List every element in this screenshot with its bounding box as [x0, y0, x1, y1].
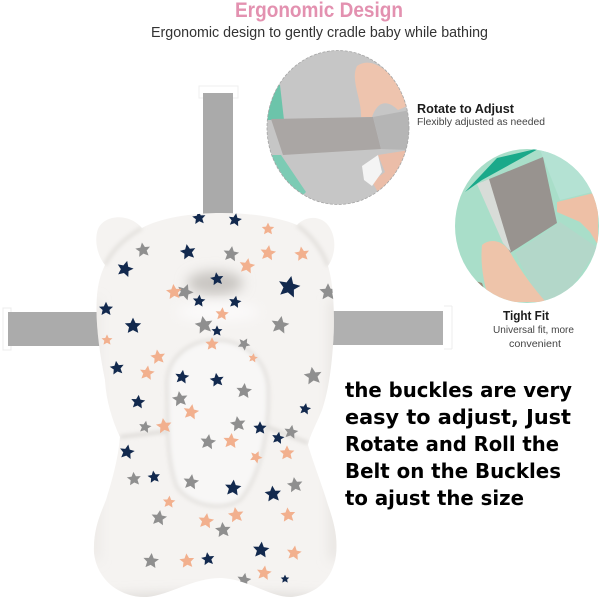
- buckle explanation text: Rotate and Roll the: [345, 432, 559, 456]
- buckle explanation text: easy to adjust, Just: [345, 405, 571, 429]
- bath cushion: [85, 205, 345, 600]
- navy stars: [99, 211, 312, 583]
- hand above strap: [355, 63, 410, 117]
- callout: tight fit: Tight Fit: [503, 308, 550, 323]
- strap fold creases: [120, 425, 308, 443]
- callout: rotate to adjust: Flexibly adjusted as needed: [417, 116, 545, 128]
- buckle explanation text: to ajust the size: [345, 486, 524, 510]
- peach stars: [102, 223, 310, 580]
- top strap with buckle: [199, 86, 238, 218]
- fingers: [557, 192, 598, 245]
- buckle explanation text: [345, 378, 572, 510]
- callout: tight fit: [493, 308, 574, 350]
- cushion shading: [124, 266, 336, 597]
- photo circle: tight fit: [455, 149, 599, 303]
- ear creases: [105, 225, 328, 266]
- grey stars: [126, 241, 337, 587]
- fabric strap: [271, 117, 381, 155]
- buckle explanation text: the buckles are very: [345, 378, 572, 402]
- fabric strap: [482, 157, 557, 253]
- callout: rotate to adjust: [417, 102, 545, 128]
- callout: rotate to adjust: Rotate to Adjust: [417, 102, 515, 116]
- buckle explanation text: Belt on the Buckles: [345, 459, 561, 483]
- hand below strap: [374, 150, 406, 191]
- photo circle: rotate to adjust: [266, 50, 410, 205]
- neck support pad: [167, 340, 268, 506]
- right strap with buckle: [325, 306, 452, 349]
- subtitle: Ergonomic design to gently cradle baby while bathing: [151, 25, 488, 41]
- callout: tight fit: convenient: [509, 338, 561, 350]
- callout: tight fit: Universal fit, more: [493, 324, 574, 336]
- left strap with buckle: [3, 308, 102, 350]
